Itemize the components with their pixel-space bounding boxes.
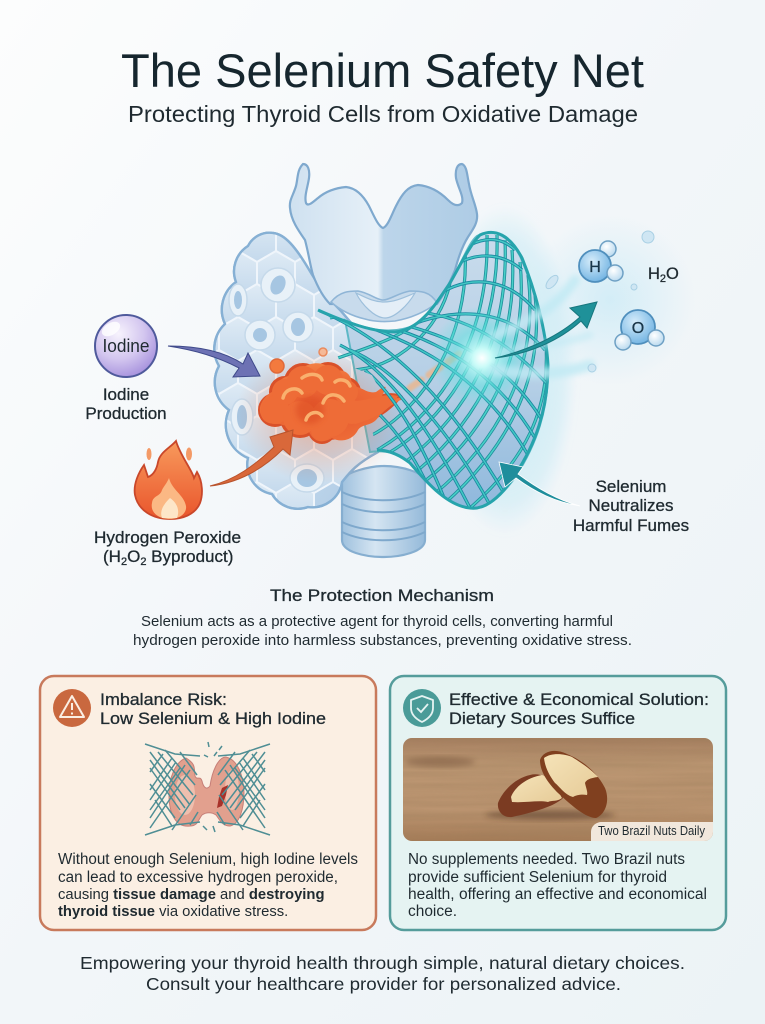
icon: flame: [135, 441, 202, 519]
panel body: No supplements needed. Two Brazil nuts: [408, 851, 685, 868]
molecule: O: O: [632, 320, 644, 337]
small bubbles: [544, 231, 654, 372]
nut: front: [498, 774, 563, 817]
harmful fumes cloud: [235, 347, 462, 483]
photo caption: [591, 822, 713, 841]
damaged thyroid: [169, 757, 244, 826]
thyroid illustration: [200, 164, 695, 557]
glowing neutralization point: [430, 306, 534, 410]
hydrogen peroxide label: O: [127, 547, 140, 566]
photo: two Brazil nuts on wood: [403, 738, 713, 841]
hydrogen peroxide label: [94, 528, 241, 568]
H2O label: 2: [660, 273, 666, 285]
selenium label: Harmful Fumes: [573, 516, 689, 535]
subtitle: Protecting Thyroid Cells from Oxidative Damage: [128, 101, 638, 127]
panel heading: Imbalance Risk:: [100, 691, 227, 709]
panel body: provide sufficient Selenium for thyroid: [408, 869, 667, 886]
arrow: selenium label to net: [499, 462, 580, 506]
molecule: H: [579, 241, 623, 282]
left thyroid lobe with cells: [213, 232, 380, 510]
footer message: Empowering your thyroid health through simple, natural dietary choices.: [80, 953, 685, 973]
molecule: O: [615, 310, 664, 350]
panel body: causing tissue damage and destroying: [58, 887, 324, 903]
section heading: The Protection Mechanism: [270, 586, 494, 605]
hydrogen peroxide label: 2: [140, 556, 146, 568]
iodine production label: Iodine: [103, 385, 149, 404]
panel body: choice.: [408, 903, 457, 920]
photo caption: Two Brazil Nuts Daily: [598, 824, 706, 838]
icon: shield: [403, 689, 441, 727]
panel body: can lead to excessive hydrogen peroxide,: [58, 869, 338, 886]
panel heading: Low Selenium & High Iodine: [100, 710, 326, 728]
damaged thyroid illustration: [145, 742, 270, 835]
selenium label: Selenium: [596, 477, 666, 496]
hydrogen peroxide label: Hydrogen Peroxide: [94, 528, 241, 547]
mechanism description: hydrogen peroxide into harmless substances, preventing oxidative stress.: [133, 633, 632, 649]
water molecules: [544, 231, 664, 372]
panel heading: Effective & Economical Solution:: [449, 691, 709, 709]
trachea: [342, 466, 425, 557]
glow around the net: [433, 205, 577, 535]
arrow: iodine to thyroid: [168, 346, 260, 377]
arrow: neutralized output: [495, 302, 597, 358]
neutralized vapor stream: [495, 280, 590, 373]
panel: imbalance risk: [40, 676, 376, 930]
selenium safety net: [318, 235, 548, 508]
net outline: [318, 232, 548, 508]
H2O label: O: [666, 265, 679, 283]
panel body: thyroid tissue via oxidative stress.: [58, 904, 288, 920]
hydrogen peroxide label: Byproduct): [146, 547, 233, 566]
panel body: Without enough Selenium, high Iodine levels: [58, 851, 358, 868]
molecule: H: H: [589, 259, 601, 276]
broken net: [145, 742, 270, 835]
iodine sphere icon: Iodine: [102, 336, 150, 356]
right thyroid lobe: [345, 233, 548, 508]
mechanism description: Selenium acts as a protective agent for thyroid cells, converting harmful: [141, 614, 613, 630]
hydrogen peroxide label: (H: [103, 547, 121, 566]
panel body: health, offering an effective and economical: [408, 886, 707, 903]
title: The Selenium Safety Net: [121, 44, 644, 97]
iodine sphere icon: [95, 315, 157, 377]
panel: dietary solution: [390, 676, 726, 930]
nut: back: [540, 751, 607, 818]
selenium label: Neutralizes: [588, 496, 674, 515]
arrow: peroxide to thyroid: [210, 430, 293, 486]
H2O label: H: [648, 265, 660, 283]
panel heading: Dietary Sources Suffice: [449, 710, 635, 728]
hydrogen peroxide label: 2: [121, 556, 127, 568]
iodine production label: Production: [85, 404, 167, 423]
thyroid cartilage: [290, 164, 477, 322]
icon: warning: [53, 689, 91, 727]
haze behind molecules: [525, 215, 695, 385]
footer message: Consult your healthcare provider for personalized advice.: [146, 974, 621, 994]
